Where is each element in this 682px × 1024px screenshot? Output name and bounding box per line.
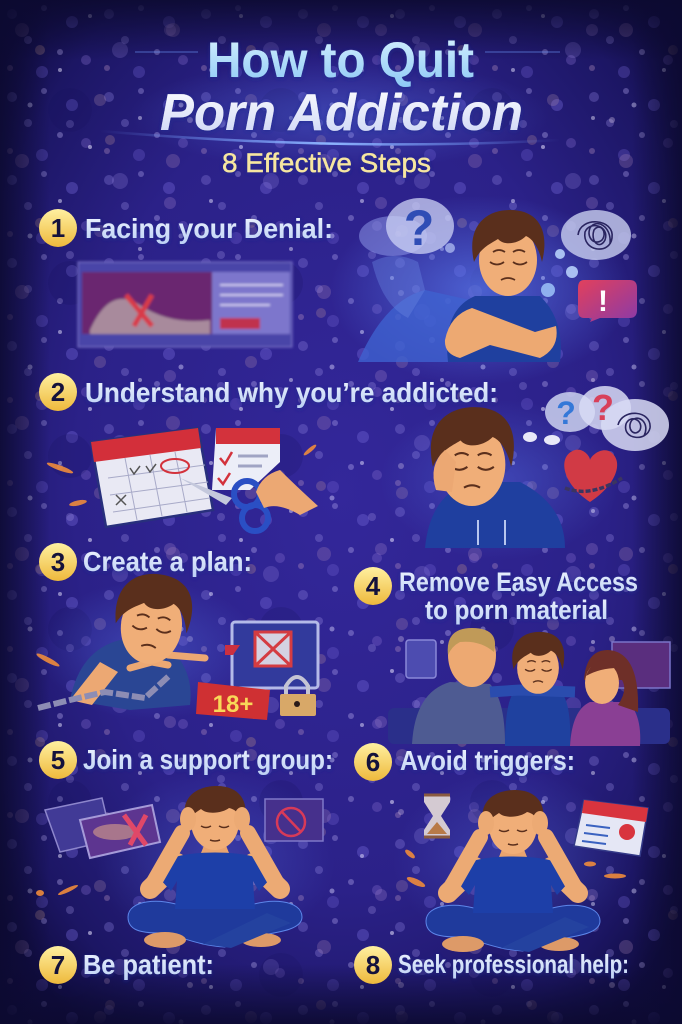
- step 1 heading: Facing your Denial:: [85, 213, 333, 244]
- title: [160, 32, 523, 178]
- title line two: Porn Addiction: [160, 84, 523, 142]
- thought cloud: tangled scribble: [561, 210, 631, 260]
- icon: prohibited image: [265, 799, 323, 841]
- step 7 heading: Be patient:: [83, 949, 214, 980]
- illustration: monitor with crossed-out page: [225, 622, 318, 688]
- illustration: meditating boy, left: [128, 786, 302, 948]
- step 4 heading: to porn material: [425, 595, 608, 625]
- illustration: meditating boy, right: [426, 790, 600, 952]
- thought clouds: question marks and scribble: ?: [556, 395, 576, 431]
- thought cloud: question mark: ?: [404, 200, 434, 256]
- icon: calendar with heart check: [574, 800, 648, 856]
- girl: [570, 702, 640, 746]
- step 3 heading: [39, 543, 252, 581]
- illustration: browser window with crossed-out content: [78, 262, 292, 347]
- step 1 heading: [39, 209, 333, 247]
- step 8 heading: [354, 946, 629, 984]
- sparks: [35, 443, 626, 896]
- icon: hourglass: [424, 795, 450, 837]
- step 3 heading: Create a plan:: [83, 546, 252, 577]
- illustration: friends supporting each other: [388, 628, 670, 746]
- illustration: boy holding his head: [425, 407, 565, 548]
- step 8 heading: Seek professional help:: [398, 949, 629, 979]
- step 2 heading: Understand why you’re addicted:: [85, 377, 498, 408]
- subtitle: 8 Effective Steps: [222, 148, 431, 178]
- badge: 18+: 18+: [213, 691, 253, 718]
- icon: chained heart: [564, 450, 622, 502]
- badge: 18+: [196, 682, 270, 720]
- checklist: [212, 428, 280, 490]
- step 4 heading: 4: [366, 571, 381, 601]
- thought clouds: question marks and scribble: [523, 386, 669, 451]
- sofa: [388, 708, 670, 744]
- icon: padlock: [280, 677, 316, 716]
- illustration: boy breaking a chain: [38, 569, 205, 710]
- step 6 heading: Avoid triggers:: [400, 745, 575, 776]
- thought cloud: question mark: [359, 198, 578, 297]
- step 6 heading: [354, 743, 575, 781]
- step 1 heading: 1: [51, 213, 65, 243]
- clipboard: [406, 640, 436, 678]
- illustration: calendar and checklist with scissors: [91, 428, 318, 531]
- boy body with crossed arms: [447, 296, 561, 362]
- wall screen: [612, 642, 670, 688]
- step 3 heading: 3: [51, 547, 65, 577]
- middle boy: [505, 688, 570, 746]
- title line one: How to Quit: [207, 32, 474, 88]
- speech bubble: exclamation: [578, 280, 637, 322]
- step 5 heading: 5: [51, 745, 65, 775]
- blond friend: [412, 682, 505, 744]
- step 5 heading: [39, 741, 333, 779]
- illustration: boy in denial with shadow self: [358, 210, 561, 362]
- step 7 heading: 7: [51, 950, 65, 980]
- shadow figure: [358, 290, 470, 362]
- step 6 heading: 6: [366, 747, 380, 777]
- step 7 heading: [39, 946, 214, 984]
- step 5 heading: Join a support group:: [83, 744, 333, 775]
- scissors: [180, 478, 232, 505]
- step 8 heading: 8: [366, 950, 380, 980]
- hand: [256, 470, 318, 515]
- illustration: blocked image cards: [45, 798, 160, 858]
- step 2 heading: [39, 373, 498, 411]
- step 4 heading: [354, 567, 638, 625]
- step 2 heading: 2: [51, 377, 65, 407]
- calendar: [91, 428, 213, 527]
- thought clouds: question marks and scribble: ?: [592, 387, 614, 428]
- title underline: [100, 52, 560, 144]
- step 4 heading: Remove Easy Access: [399, 567, 638, 597]
- speech bubble: exclamation: !: [598, 285, 608, 318]
